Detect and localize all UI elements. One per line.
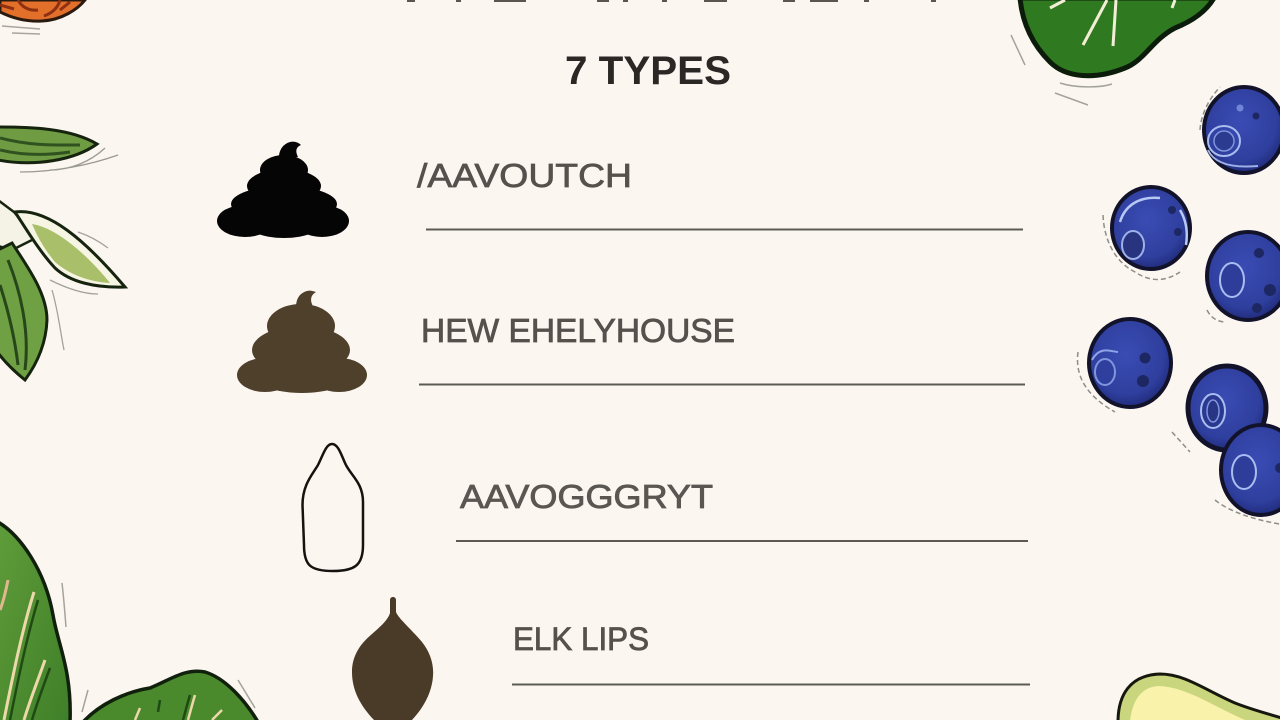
blueberry 3 [1207,232,1280,320]
blueberry 1 [1204,87,1280,173]
blueberry 4 [1089,319,1171,407]
blueberry 6 [1221,425,1280,515]
blueberries [1089,87,1280,515]
title: 7 types: 7 TYPES [565,49,731,93]
icon: brown stool mound [237,291,367,393]
icon: dark brown seed shape [352,597,433,720]
icon: outlined bottle shape [302,444,363,571]
illustration: bottom centre-left leaf [82,671,258,720]
label row 3: AAVOGGGRYT [460,478,713,515]
type row 2 [237,291,735,393]
blueberry 5 [1188,366,1266,450]
icon: black stool mound [217,142,349,238]
divider lines [419,230,1030,684]
label row 2: HEW EHELYHOUSE [421,312,735,349]
type row 4 [352,597,649,720]
illustration: top right leaf [1011,0,1214,105]
illustration: avocado bottom right [1118,674,1280,720]
illustration: orange fruit top left [0,0,85,34]
illustration: top left leaf [0,127,118,172]
blueberry 2 [1112,187,1190,269]
type row 3 [302,444,713,571]
illustration: left leaves and white flower [0,200,125,380]
illustration: bottom left large leaf [0,522,70,720]
clipped heading remnants at top edge [407,0,936,2]
illustration: blueberry sketch marks [1077,87,1280,524]
label row 1: /AAVOUTCH [417,157,632,194]
label row 4: ELK LIPS [513,621,649,657]
type row 1 [217,142,632,238]
